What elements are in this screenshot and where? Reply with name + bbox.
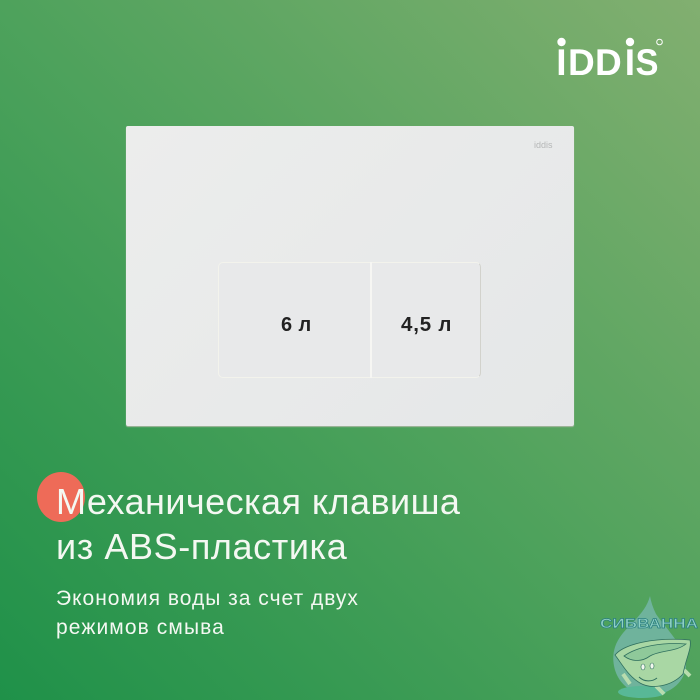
logo: iddis: I bbox=[625, 42, 635, 82]
small plate logo: iddis bbox=[534, 140, 553, 150]
title: Механическая клавиша bbox=[56, 481, 460, 522]
logo: iddis: I bbox=[556, 42, 566, 82]
panel: flush plate bbox=[126, 126, 574, 426]
legs bbox=[623, 670, 690, 694]
button: 4.5 litres bbox=[372, 262, 481, 378]
bottom glow bbox=[618, 686, 666, 698]
watermark: sibvanna logo bbox=[600, 596, 698, 698]
button: 6 litres bbox=[218, 262, 370, 378]
description text: режимов смыва bbox=[56, 616, 225, 639]
logo: iddis: S bbox=[636, 42, 658, 82]
button divider bbox=[370, 262, 372, 378]
label: 4.5 l: 4,5 л bbox=[401, 313, 452, 336]
water drop bbox=[613, 596, 686, 695]
face bbox=[639, 663, 657, 681]
title: из ABS-пластика bbox=[56, 526, 347, 567]
logo: iddis: D bbox=[568, 42, 595, 82]
label: 6 l: 6 л bbox=[281, 314, 312, 336]
logo: iddis: D bbox=[595, 42, 622, 82]
tub rim bbox=[624, 644, 686, 660]
bathtub bbox=[615, 639, 690, 686]
brand name: СИБВАННА bbox=[600, 615, 698, 631]
icon: coral circle accent bbox=[37, 472, 85, 522]
title bbox=[56, 481, 460, 567]
logo: iddis bbox=[556, 38, 663, 82]
description text bbox=[56, 587, 359, 639]
description text: Экономия воды за счет двух bbox=[56, 587, 359, 610]
